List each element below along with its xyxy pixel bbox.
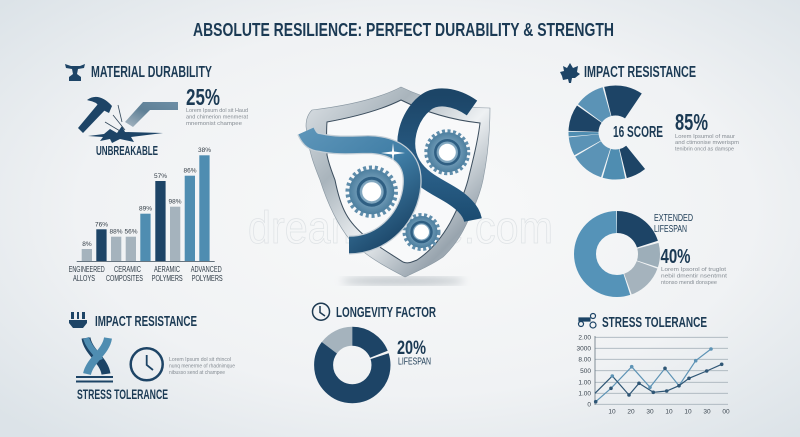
line chart: [577, 334, 730, 416]
shield frame: [306, 87, 490, 277]
icon: clock: [131, 348, 163, 380]
donut chart: lifespan: [585, 222, 649, 286]
text block: score note: and ctimonise mwerispm: [675, 140, 740, 146]
bar chart: materials: ENGINEERED: [69, 265, 105, 274]
panel: impact resistance right: [560, 63, 740, 164]
bar chart: materials: 57%: [154, 173, 167, 180]
icon: machine: [578, 314, 596, 328]
stat: 85%: 85%: [675, 109, 708, 135]
panel: material durability: [65, 64, 249, 158]
bar chart: materials: 56%: [124, 228, 138, 236]
panel: longevity factor: [312, 303, 436, 394]
gear: bottom: [404, 215, 438, 249]
radial segment chart: [584, 100, 648, 164]
heading: impact resistance: IMPACT RESISTANCE: [95, 313, 197, 330]
line chart: 20: [627, 408, 635, 416]
line chart: 0: [587, 402, 591, 408]
icon: anvil: [65, 64, 85, 81]
shadow: [341, 277, 465, 285]
icon: hammer striking plate: [78, 97, 178, 143]
sparkle: [381, 143, 405, 163]
panel: impact resistance left: [69, 312, 235, 402]
text block: impact note: [169, 357, 235, 376]
icon: maple leaf: [560, 63, 580, 83]
line chart: 00: [722, 408, 730, 416]
bar chart: materials: 89%: [139, 206, 152, 212]
stat: 40%: 40%: [660, 246, 691, 268]
bar chart: materials: 8%: [82, 241, 92, 248]
line chart: 3000: [577, 346, 591, 352]
line chart: 10: [608, 408, 616, 416]
stat: 20% lifespan: LIFESPAN: [398, 356, 431, 368]
donut chart: longevity: [324, 336, 381, 394]
line chart: 1.00: [578, 390, 591, 398]
gear: left: [348, 168, 396, 216]
bar chart: materials: COMPOSITES: [106, 274, 143, 283]
line chart: 30: [646, 408, 654, 416]
central shield illustration: [306, 87, 490, 285]
bar chart: materials: 38%: [198, 147, 211, 154]
text block: impact note: nibusso send at champee: [169, 370, 225, 376]
bar chart: materials: [69, 147, 223, 283]
text block: material note: mnemonist champee: [186, 121, 242, 127]
text block: score note: tenibrin oncd as damspe: [675, 146, 734, 152]
line chart: 30: [703, 408, 711, 416]
label: unbreakable: UNBREAKABLE: [96, 143, 158, 158]
bar chart: materials: 86%: [183, 168, 197, 174]
text block: material note: Lorem Ipsum dol sit Haud: [186, 108, 248, 114]
line chart: 10: [684, 408, 692, 416]
text: dreamstime.com: [248, 202, 553, 253]
bar chart: materials: 76%: [95, 222, 108, 228]
text block: score note: Lorem Ipsumol of maur: [675, 134, 735, 140]
heading: extended lifespan: EXTENDED: [654, 212, 693, 224]
bar chart: materials: 88%: [109, 228, 123, 236]
title: ABSOLUTE RESILIENCE: PERFECT DURABILITY & STRENGTH: [193, 20, 614, 40]
heading: impact resistance: IMPACT RESISTANCE: [584, 64, 696, 81]
bar chart: materials: ADVANCED: [191, 265, 222, 274]
label: stress tolerance: STRESS TOLERANCE: [77, 386, 168, 402]
bar chart: materials: CERAMIC: [114, 265, 141, 274]
stat: 20% lifespan: 20%: [397, 338, 426, 359]
text block: impact note: Lorem Ipsum dol sit rhincol: [169, 357, 231, 363]
line chart: 1.00: [578, 380, 591, 386]
text block: impact note: nunq menerme of rhadnimque: [169, 364, 235, 370]
text block: material note: and chimerion menmerat: [186, 114, 249, 120]
bar chart: materials: 98%: [168, 198, 182, 206]
line chart: 500: [580, 368, 591, 375]
heading: stress tolerance: STRESS TOLERANCE: [602, 314, 707, 331]
heading: material durability: MATERIAL DURABILITY: [91, 64, 212, 81]
chart centre label: 16 SCORE: [613, 124, 663, 141]
icon: clock: [312, 303, 330, 320]
line chart: 10: [665, 408, 673, 416]
text block: lifespan note: [661, 267, 728, 286]
icon: twisted column: [76, 338, 113, 382]
text block: lifespan note: Lorem Ipsorol of truglot: [661, 267, 727, 273]
text block: score note: [675, 134, 740, 152]
stat: 25%: 25%: [186, 84, 220, 110]
bar chart: materials: POLYMERS: [152, 274, 183, 283]
icon: ship: [69, 312, 87, 328]
panel: stress tolerance: [577, 314, 730, 416]
bar chart: materials: POLYMERS: [192, 274, 223, 283]
line chart: 8.00: [578, 356, 591, 364]
text block: material note: [186, 108, 249, 127]
text block: lifespan note: nebil dmentir nsentmnt: [661, 274, 728, 280]
heading: extended lifespan: [654, 212, 693, 235]
gear: upper right: [426, 131, 468, 173]
stat: 20% lifespan: [397, 338, 431, 368]
bar chart: materials: ALLOYS: [73, 274, 95, 283]
bar chart: materials: AERAMIC: [154, 265, 180, 274]
heading: longevity factor: LONGEVITY FACTOR: [336, 304, 436, 321]
blue ribbon: [306, 131, 412, 245]
text block: lifespan note: ntonso mendi donspee: [661, 280, 717, 286]
dark ribbon: [406, 97, 473, 220]
heading: extended lifespan: LIFESPAN: [654, 223, 687, 235]
line chart: 2.00: [578, 334, 591, 342]
panel: extended lifespan: [585, 212, 728, 286]
